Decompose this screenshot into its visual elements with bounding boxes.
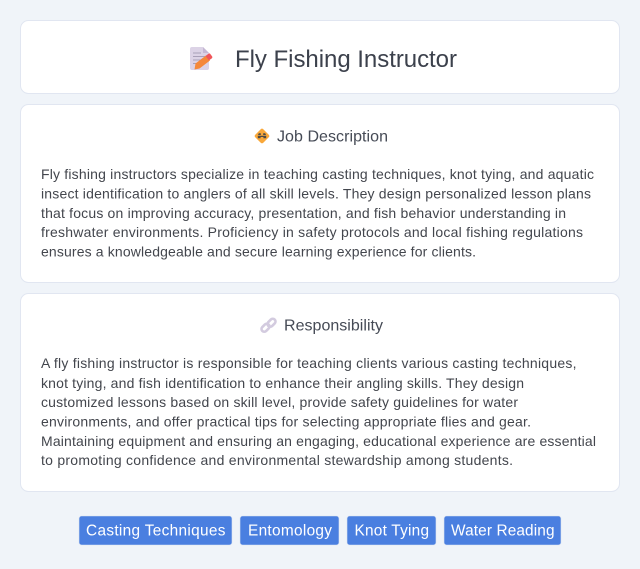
tag: entomology xyxy=(240,516,339,545)
job description text xyxy=(41,166,594,260)
responsibility heading: Responsibility xyxy=(284,318,383,334)
job description heading: Job Description xyxy=(277,128,388,146)
skill tags xyxy=(79,516,561,545)
responsibility text: Maintaining equipment and ensuring an engaging, educational experience are essential xyxy=(41,433,596,449)
icon: document with pencil xyxy=(190,47,212,70)
responsibility text: customized lessons based on skill level, provide safety guidelines for water xyxy=(41,394,518,410)
tag: knot tying xyxy=(347,516,436,545)
responsibility text: A fly fishing instructor is responsible for teaching clients various casting techniques, xyxy=(41,355,576,371)
job description text: Fly fishing instructors specialize in teaching casting techniques, knot tying, and aquatic xyxy=(41,166,594,182)
tag: water reading: Water Reading xyxy=(451,522,554,540)
tag: casting techniques: Casting Techniques xyxy=(86,522,226,540)
job description text: insect identification to anglers of all skill levels. They design personalized lesson plans xyxy=(41,186,591,202)
panel: job description xyxy=(20,104,620,282)
responsibility text: environments, and offer practical tips for selecting appropriate flies and gear. xyxy=(41,414,531,430)
responsibility text: to promoting confidence and environmental stewardship among students. xyxy=(41,452,513,468)
responsibility text xyxy=(41,355,596,468)
job description text: ensures a knowledgeable and secure learning experience for clients. xyxy=(41,244,476,260)
icon: orange diamond sign xyxy=(254,128,270,144)
job description text: that focus on improving accuracy, presentation, and fish behavior understanding in xyxy=(41,205,566,221)
panel: title xyxy=(20,20,620,94)
panel: responsibility xyxy=(20,294,620,492)
tag: entomology: Entomology xyxy=(248,522,332,540)
icon: chain link xyxy=(260,318,277,333)
title text: Fly Fishing Instructor xyxy=(235,46,457,73)
responsibility text: knot tying, and fish identification to enhance their angling skills. They design xyxy=(41,375,524,391)
job description text: freshwater environments. Proficiency in safety protocols and local fishing regulations xyxy=(41,224,583,240)
tag: casting techniques xyxy=(79,516,232,545)
tag: water reading xyxy=(444,516,561,545)
tag: knot tying: Knot Tying xyxy=(354,522,429,540)
